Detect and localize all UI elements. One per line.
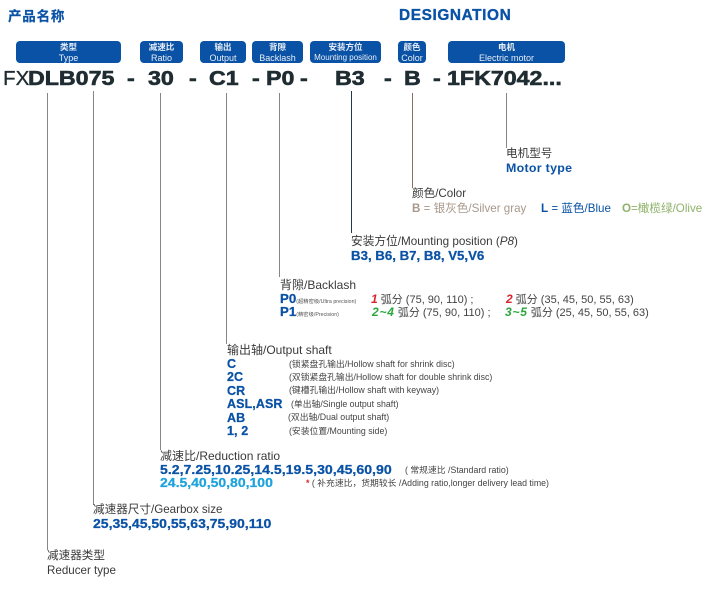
- color heading: 颜色/Color: [412, 187, 466, 200]
- option: blue: L = 蓝色/Blue: [541, 202, 611, 215]
- tag: output: [200, 41, 246, 63]
- standard ratio note: ( 常规速比 /Standard ratio): [405, 465, 509, 475]
- color options: [412, 202, 702, 215]
- standard ratios: 5.2,7.25,10.25,14.5,19.5,30,45,60,90: [160, 463, 392, 477]
- P0 value 1: 1 弧分 (75, 90, 110) ;: [371, 292, 473, 306]
- tag: output: 输出: [214, 42, 232, 52]
- code 1,2: 1, 2: [227, 424, 248, 438]
- P0 label: P0(超精密级/Ultra precision): [280, 292, 356, 306]
- leader line: reducer type: [47, 93, 48, 550]
- description AB: (双出轴/Dual output shaft): [288, 412, 389, 422]
- P0 value 2: 2 弧分 (35, 45, 50, 55, 63): [506, 292, 634, 306]
- block: color: [412, 187, 702, 215]
- description C: (锁紧盘孔输出/Hollow shaft for shrink disc): [289, 359, 455, 369]
- code AB: AB: [227, 411, 245, 425]
- adding ratios: 24.5,40,50,80,100: [160, 476, 273, 490]
- block: reducer type: [47, 549, 116, 577]
- code: dash: -: [252, 68, 260, 90]
- tag: electric motor: [448, 41, 565, 63]
- code: dash: -: [433, 68, 441, 90]
- code: DLB075: DLB075: [28, 68, 114, 90]
- leader line: mounting position: [351, 91, 352, 233]
- tag: ratio: Ratio: [151, 52, 172, 62]
- P1 value 2: 3~5 弧分 (25, 45, 50, 55, 63): [505, 305, 649, 319]
- code: FX prefix: FX: [3, 68, 29, 90]
- tag: output: Output: [209, 52, 237, 62]
- code: dash: -: [300, 68, 308, 90]
- code: dash: -: [127, 68, 135, 90]
- adding ratio note: * ( 补充速比，货期较长 /Adding ratio,longer delivery lead time): [306, 478, 549, 488]
- leader line: reduction ratio: [160, 93, 161, 450]
- motor type heading: 电机型号: [506, 147, 552, 160]
- tag: electric motor: Electric motor: [479, 52, 534, 62]
- block: mounting position: [351, 234, 518, 263]
- P1 label: P1(精密级/Precision): [280, 305, 339, 319]
- option: silver gray: B = 银灰色/Silver gray: [412, 202, 526, 215]
- tag: backlash: Backlash: [259, 52, 296, 62]
- code: dash: -: [384, 68, 392, 90]
- leader line: motor type: [506, 93, 507, 148]
- block: backlash: [280, 278, 649, 319]
- label tags row: [16, 41, 565, 63]
- tag: type: [16, 41, 121, 63]
- code CR: CR: [227, 384, 245, 398]
- tag: mounting position: [310, 41, 381, 63]
- leader line: gearbox size: [93, 91, 94, 505]
- code: B3: B3: [335, 68, 365, 90]
- tag: type: 类型: [60, 42, 77, 52]
- tag: electric motor: 电机: [498, 42, 515, 52]
- code: dash: -: [189, 68, 197, 90]
- block: motor type: [506, 147, 572, 175]
- gearbox size heading: 减速器尺寸/Gearbox size: [93, 503, 222, 516]
- tag: backlash: 背隙: [269, 42, 286, 52]
- tag: color: 颜色: [403, 42, 420, 52]
- code: B: B: [404, 68, 421, 90]
- heading: Chinese product name: 产品名称: [8, 9, 65, 24]
- reducer type english: Reducer type: [47, 564, 116, 577]
- leader line: output shaft: [226, 93, 227, 344]
- block: gearbox size: [93, 503, 271, 531]
- mounting position heading: 安装方位/Mounting position (P8): [351, 235, 518, 248]
- tag: mounting position: Mounting position: [314, 52, 377, 62]
- leader line: color: [412, 93, 413, 188]
- gearbox size values: 25,35,45,50,55,63,75,90,110: [93, 517, 271, 531]
- description CR: (键槽孔输出/Hollow shaft with keyway): [289, 385, 439, 395]
- tag: ratio: [140, 41, 183, 63]
- reducer type chinese: 减速器类型: [47, 549, 105, 562]
- option: olive: O=橄榄绿/Olive: [622, 202, 702, 215]
- tag: ratio: 减速比: [149, 42, 174, 52]
- description 2C: (双锁紧盘孔输出/Hollow shaft for double shrink disc): [289, 372, 492, 382]
- tag: mounting position: 安装方位: [328, 42, 362, 52]
- code C: C: [227, 357, 236, 371]
- code 2C: 2C: [227, 370, 243, 384]
- code: P0: P0: [266, 68, 294, 90]
- description 1,2: (安装位置/Mounting side): [289, 426, 387, 436]
- backlash heading: 背隙/Backlash: [280, 278, 356, 292]
- type code string: [3, 68, 562, 90]
- block: reduction ratio: [160, 449, 549, 490]
- block: output shaft: [227, 343, 492, 438]
- leader line: backlash: [279, 93, 280, 277]
- mounting position codes: B3, B6, B7, B8, V5,V6: [351, 249, 484, 263]
- code: 30: 30: [148, 68, 174, 90]
- output shaft heading: 输出轴/Output shaft: [227, 343, 332, 357]
- tag: type: Type: [59, 52, 78, 62]
- tag: color: [398, 41, 426, 63]
- motor type english: Motor type: [506, 161, 572, 175]
- tag: color: Color: [401, 52, 423, 62]
- code: C1: C1: [209, 68, 239, 90]
- code: motor: 1FK7042...: [447, 68, 562, 90]
- heading: DESIGNATION: DESIGNATION: [399, 7, 511, 24]
- description ASL ASR: (单出轴/Single output shaft): [291, 399, 399, 409]
- P1 value 1: 2~4 弧分 (75, 90, 110) ;: [372, 305, 491, 319]
- reduction ratio heading: 减速比/Reduction ratio: [160, 449, 280, 463]
- code ASL ASR: ASL,ASR: [227, 397, 283, 411]
- tag: backlash: [252, 41, 303, 63]
